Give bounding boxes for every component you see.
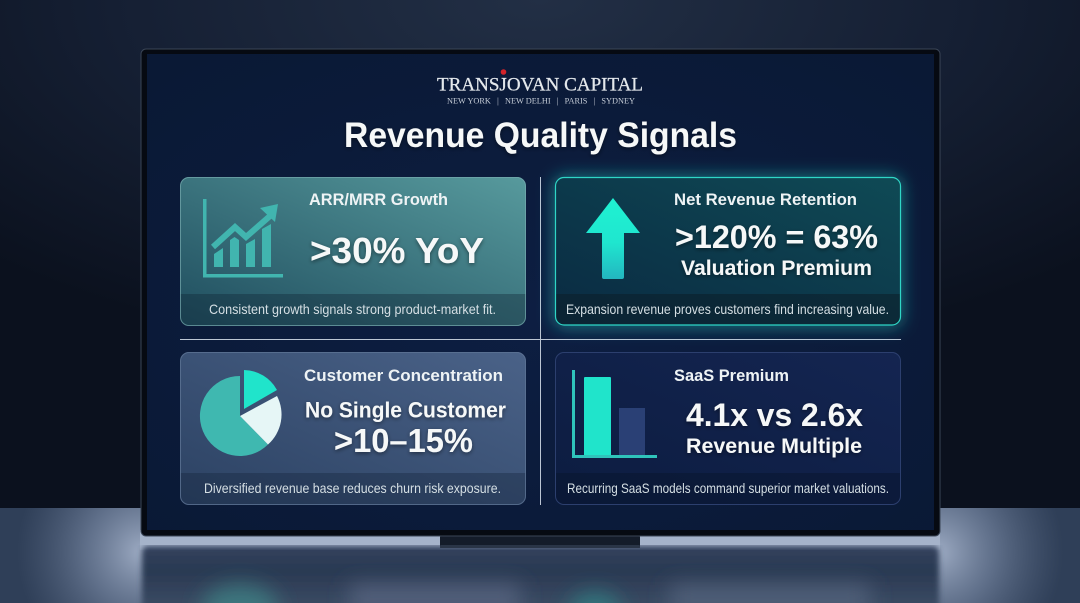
panel: ARR/MRR growth	[180, 177, 526, 326]
heading: Net Revenue Retention	[674, 190, 857, 209]
heading: SaaS Premium	[674, 366, 789, 385]
logo red dot	[501, 69, 506, 75]
monitor stand	[440, 536, 640, 548]
icon: bar chart	[572, 370, 657, 458]
heading: ARR/MRR Growth	[309, 191, 448, 209]
metric: >30% YoY	[310, 230, 484, 271]
panel: SaaS premium	[555, 352, 901, 505]
metric label: Revenue Multiple	[686, 434, 862, 458]
title: Revenue Quality Signals	[344, 116, 737, 155]
panel: customer concentration	[180, 352, 526, 505]
icon: pie chart	[200, 370, 282, 456]
dividers	[180, 177, 901, 505]
logo offices: NEW YORK | NEW DELHI | PARIS | SYDNEY	[447, 96, 635, 106]
monitor frame	[141, 49, 940, 536]
screen reflection on floor	[142, 546, 939, 603]
icon: growth chart	[203, 199, 283, 278]
metric label: Valuation Premium	[681, 257, 872, 280]
logo wordmark: TRANSJOVAN CAPITAL	[437, 76, 643, 96]
caption: Expansion revenue proves customers find increasing value.	[566, 301, 889, 317]
floor	[0, 508, 1080, 603]
monitor screen	[147, 54, 934, 530]
icon: up arrow	[586, 198, 640, 279]
panel: net revenue retention	[553, 175, 903, 328]
logo	[437, 69, 643, 106]
metric: >120% = 63%	[675, 219, 878, 255]
caption: Diversified revenue base reduces churn risk exposure.	[204, 480, 501, 496]
metric: 4.1x vs 2.6x	[686, 397, 863, 433]
caption: Recurring SaaS models command superior market valuations.	[567, 480, 889, 496]
metric: >10–15%	[334, 422, 473, 459]
caption: Consistent growth signals strong product-market fit.	[209, 301, 496, 317]
card glow	[553, 175, 903, 328]
heading: Customer Concentration	[304, 366, 503, 385]
metric label: No Single Customer	[305, 398, 506, 422]
